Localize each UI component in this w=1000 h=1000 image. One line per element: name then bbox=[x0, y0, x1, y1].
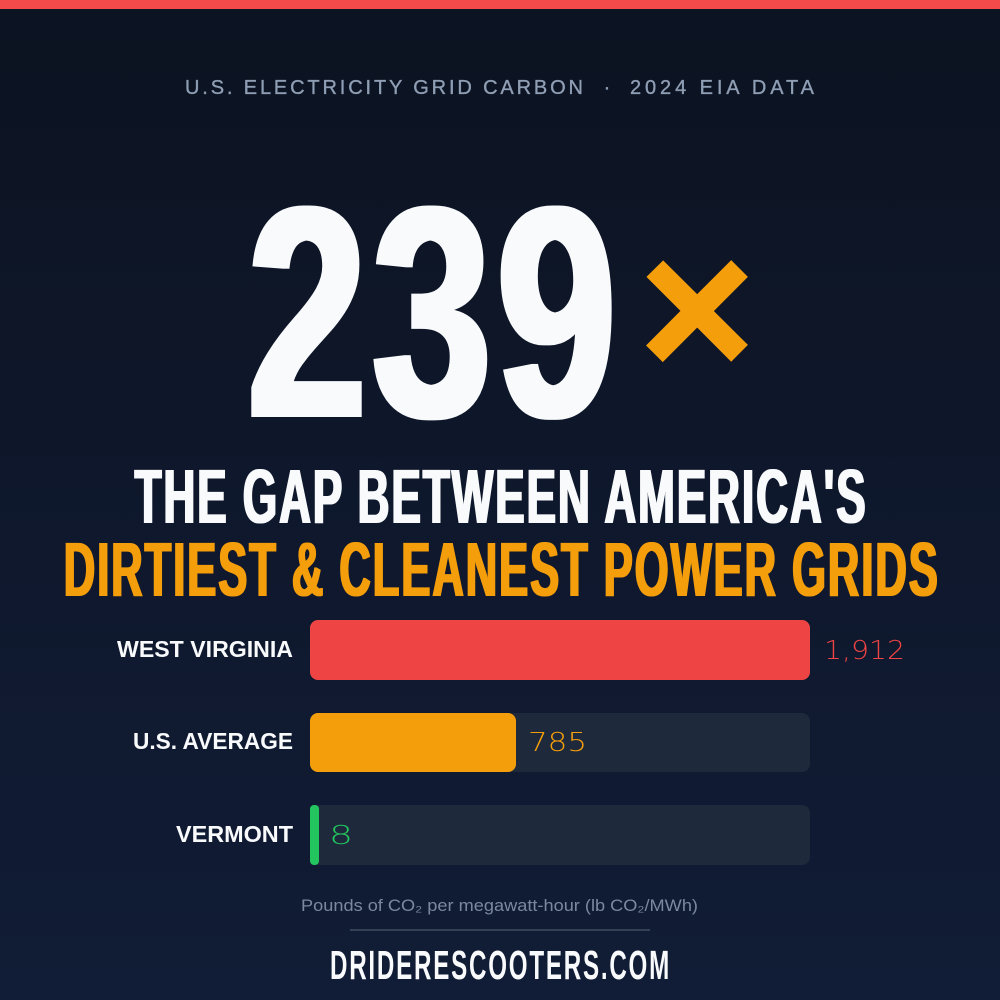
bar chart bbox=[117, 620, 905, 865]
value: 8 bbox=[329, 821, 353, 851]
bar track bbox=[310, 713, 810, 772]
eyebrow heading: · bbox=[604, 77, 610, 99]
bar fill bbox=[310, 713, 516, 772]
eyebrow heading: 2024 EIA DATA bbox=[630, 77, 815, 99]
row: Vermont bbox=[176, 805, 810, 865]
label: U.S. AVERAGE bbox=[133, 728, 293, 754]
multiplication sign: × bbox=[639, 198, 755, 419]
bar track bbox=[310, 620, 810, 680]
eyebrow heading bbox=[185, 77, 815, 99]
label: WEST VIRGINIA bbox=[117, 636, 293, 662]
bar fill bbox=[310, 620, 810, 680]
label: VERMONT bbox=[176, 821, 293, 847]
headline bbox=[64, 454, 940, 613]
eyebrow heading: U.S. ELECTRICITY GRID CARBON bbox=[185, 77, 583, 99]
hero digits: 239 bbox=[248, 144, 622, 480]
footer website: DRIDERESCOOTERS.COM bbox=[330, 942, 671, 988]
bar fill bbox=[310, 805, 319, 865]
value: 1,912 bbox=[824, 636, 905, 666]
bar track bbox=[310, 805, 810, 865]
value: 785 bbox=[528, 728, 587, 758]
row: West Virginia bbox=[117, 620, 905, 680]
row: U.S. average bbox=[133, 713, 810, 772]
top accent bar bbox=[0, 0, 1000, 9]
hero number: 239× bbox=[248, 144, 755, 480]
unit caption: Pounds of CO₂ per megawatt-hour (lb CO₂/MWh) bbox=[301, 897, 698, 915]
footer divider bbox=[350, 929, 650, 931]
